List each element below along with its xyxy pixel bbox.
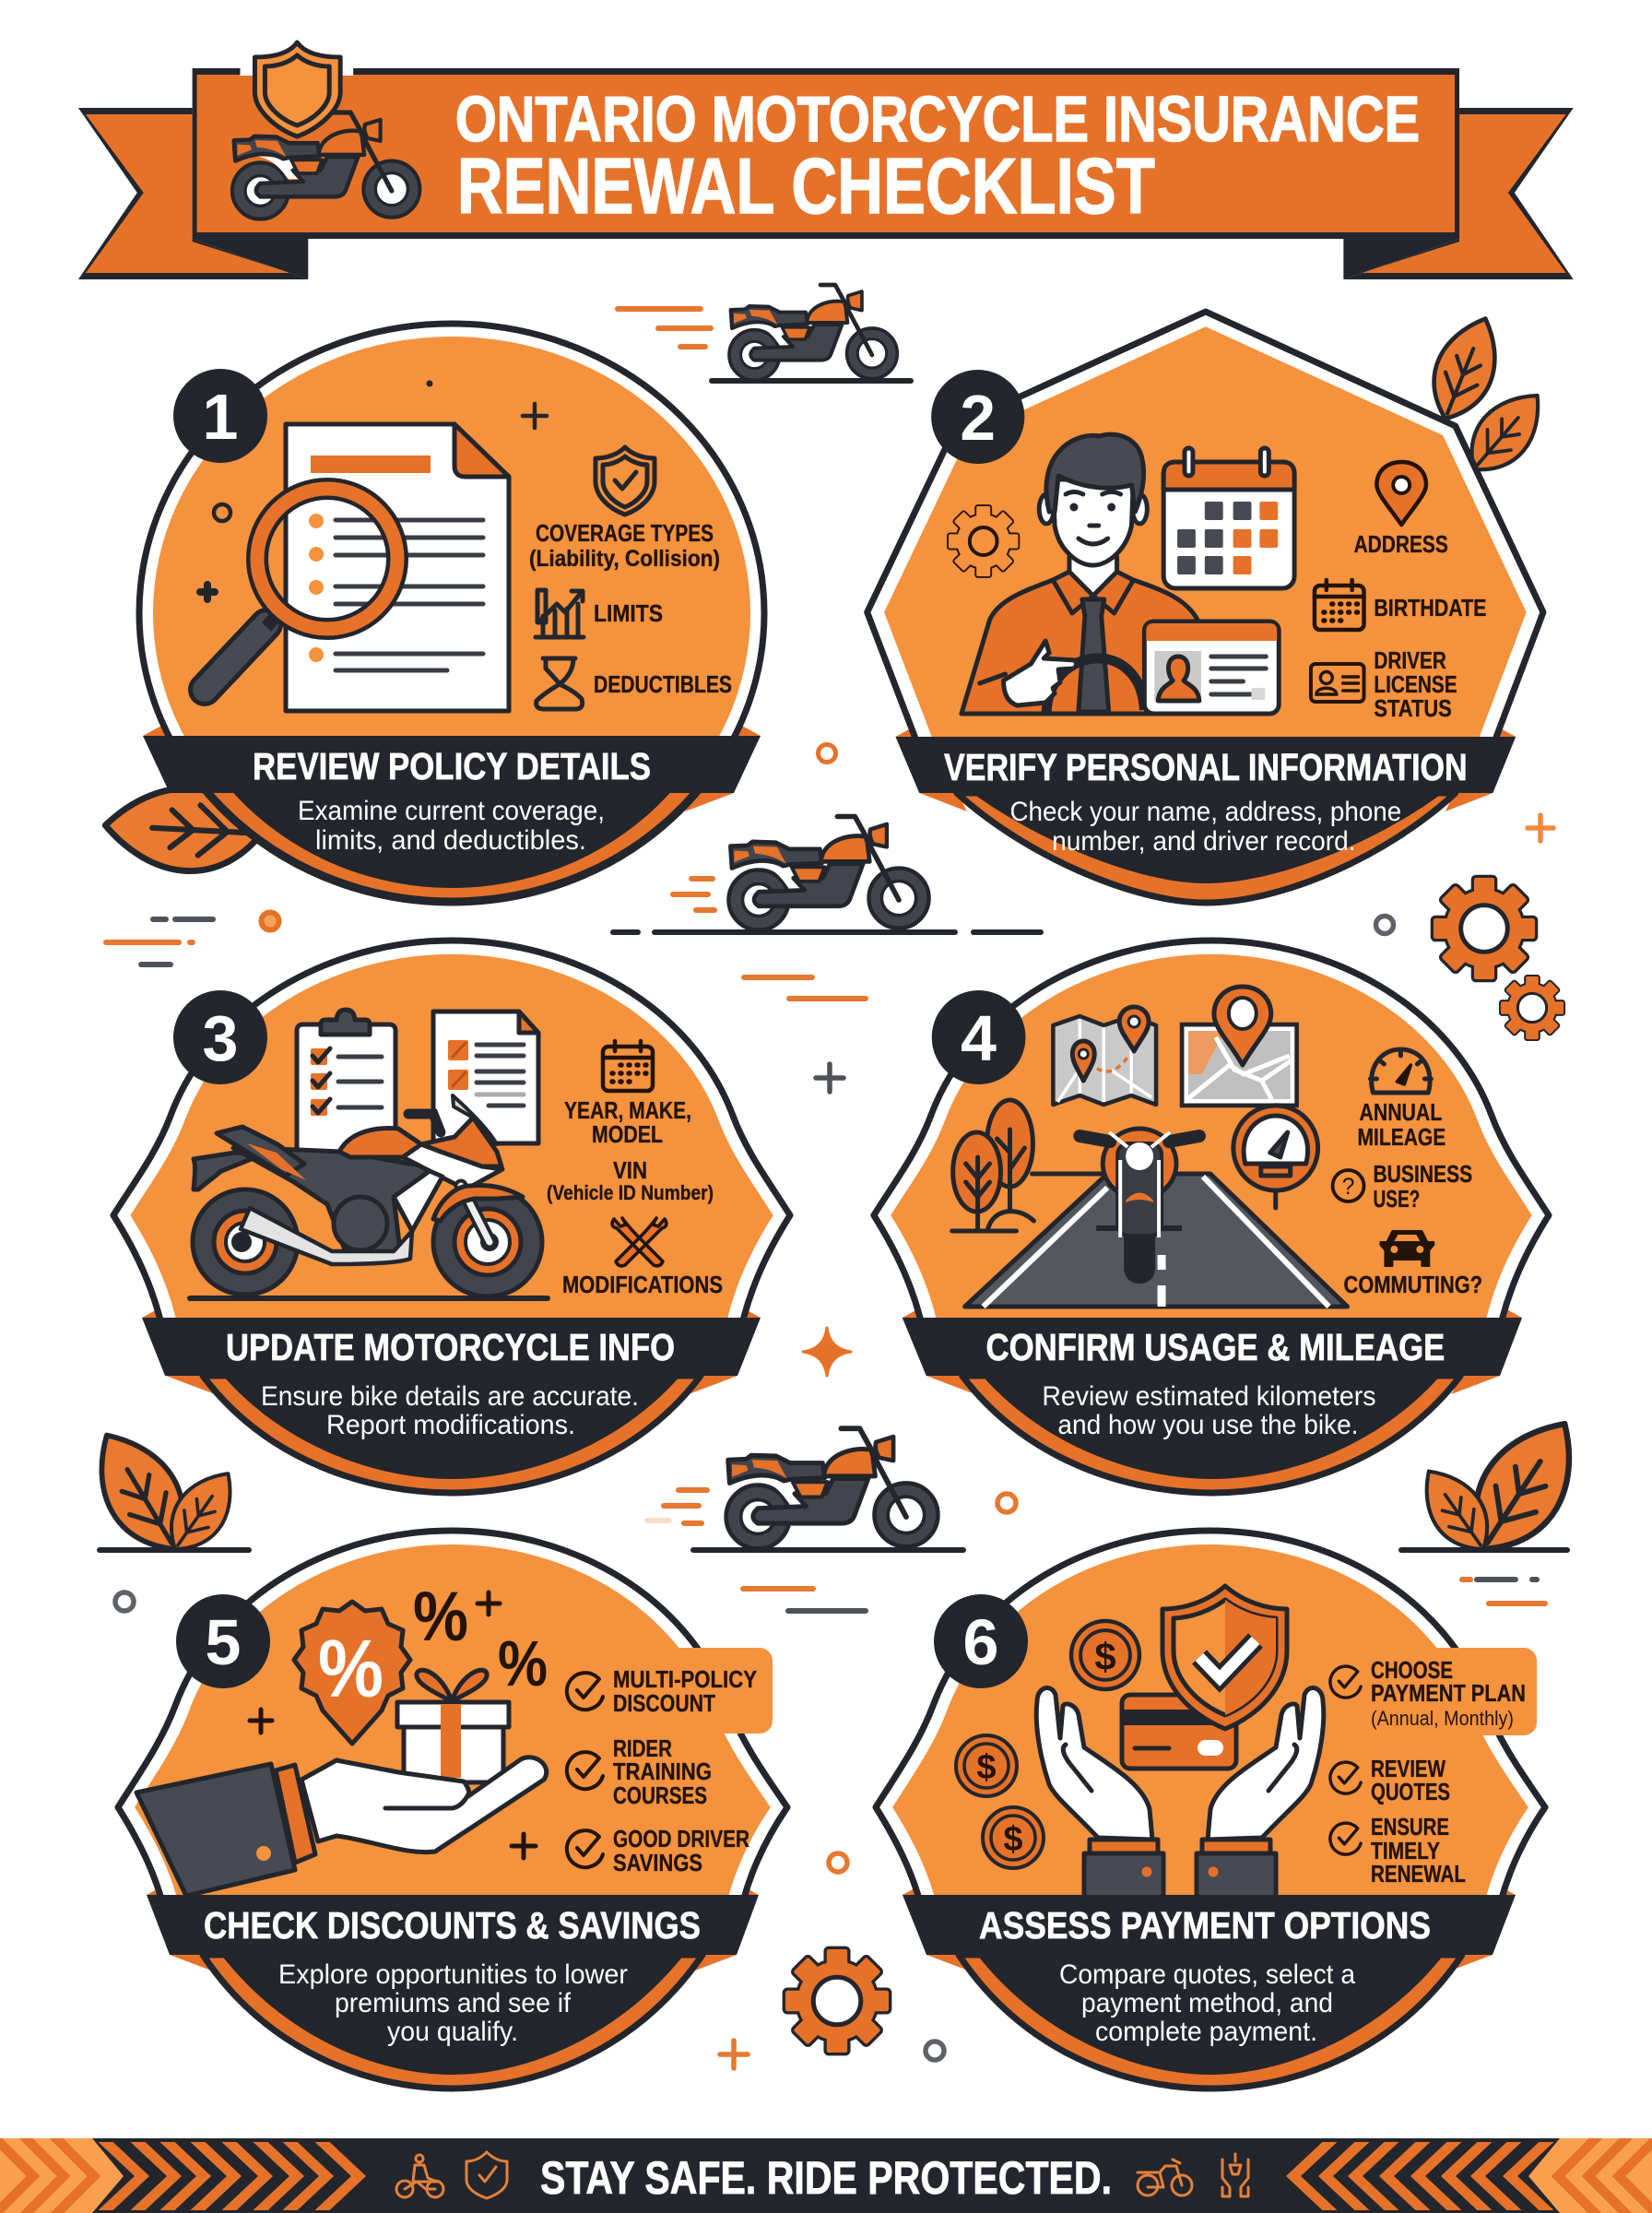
item: year, make, model: MODEL — [592, 1120, 663, 1148]
illustration: sport motorcycle — [190, 1095, 548, 1298]
panel shape — [113, 941, 790, 1346]
item: annual mileage: ANNUAL — [1360, 1098, 1442, 1126]
description: Compare quotes, select a — [1059, 1959, 1355, 1990]
panel: step 4 confirm usage and mileage — [874, 941, 1549, 1493]
item: driver license status: LICENSE — [1374, 672, 1457, 698]
description: Examine current coverage, — [298, 796, 605, 826]
ribbon wings — [142, 1307, 761, 1394]
icon: shield with check — [1162, 1586, 1287, 1729]
lower bowl — [203, 1955, 702, 2089]
bubble highlight — [645, 1648, 773, 1734]
lower bowl — [203, 1376, 701, 1493]
description: you qualify. — [387, 2017, 518, 2047]
person illustration — [962, 434, 1214, 714]
left chevrons — [0, 2130, 359, 2213]
icon: trees — [952, 1100, 1105, 1231]
bubble highlight — [1383, 1648, 1537, 1735]
floating decorations: lower band — [115, 1494, 1545, 2068]
item: choose payment plan — [1330, 1656, 1526, 1730]
step number 1 — [173, 369, 267, 463]
heading banner — [903, 1895, 1516, 1955]
panel: step 2 verify personal information — [867, 312, 1543, 903]
icon: magnifying glass — [205, 489, 397, 690]
item: good driver savings — [567, 1825, 749, 1876]
item: good driver savings: SAVINGS — [613, 1849, 702, 1876]
description — [1059, 1959, 1355, 2047]
item: choose payment plan: PAYMENT PLAN — [1371, 1679, 1526, 1707]
item: choose payment plan: (Annual, Monthly) — [1371, 1707, 1514, 1730]
panel: step 6 assess payment options — [876, 1531, 1545, 2089]
description: complete payment. — [1095, 2017, 1317, 2047]
step number 5 — [176, 1594, 270, 1688]
item: multi-policy discount — [567, 1665, 757, 1717]
step number 4: 4 — [961, 1002, 997, 1074]
description — [298, 796, 605, 856]
item: VIN: (Vehicle ID Number) — [547, 1181, 714, 1204]
item: driver license status: DRIVER — [1374, 648, 1446, 674]
icon: folded map with pins — [1053, 1007, 1156, 1105]
icon: rider — [396, 2155, 443, 2197]
item: review quotes: QUOTES — [1371, 1778, 1450, 1805]
heading banner — [895, 737, 1516, 793]
panel: step 3 update motorcycle info — [113, 941, 790, 1493]
icon: payment card — [1122, 1695, 1236, 1769]
item: business use: USE? — [1373, 1185, 1420, 1213]
icon: speedometer on post — [1233, 1106, 1318, 1208]
item: business use: BUSINESS — [1373, 1160, 1472, 1188]
item: birthdate — [1315, 580, 1486, 630]
item: ensure timely renewal: ENSURE — [1371, 1813, 1449, 1840]
description: limits, and deductibles. — [315, 825, 586, 856]
step number 6 — [934, 1594, 1028, 1688]
description: Report modifications. — [326, 1410, 575, 1440]
lower bowl — [962, 1376, 1460, 1493]
panel shape — [876, 1531, 1545, 1927]
item: review quotes — [1330, 1755, 1450, 1805]
description — [1009, 797, 1401, 857]
percent symbols: % — [498, 1627, 548, 1699]
item: choose payment plan: CHOOSE — [1371, 1656, 1453, 1684]
heading: REVIEW POLICY DETAILS — [253, 745, 651, 787]
description — [261, 1381, 639, 1440]
heading banner — [147, 1895, 759, 1955]
icon: gear — [949, 506, 1018, 576]
icon: footer hands — [1222, 2154, 1248, 2196]
lower bowl — [957, 793, 1456, 903]
motorcycle divider: middle — [613, 817, 1041, 999]
icon: calendar — [1163, 448, 1294, 588]
item: annual mileage — [1358, 1049, 1446, 1151]
step number 2 — [931, 370, 1024, 464]
ribbon main — [193, 68, 1459, 239]
description: and how you use the bike. — [1057, 1410, 1359, 1440]
icon: document — [433, 1012, 538, 1143]
ribbon tail: right — [1343, 108, 1574, 279]
ribbon fold: right — [1343, 239, 1459, 279]
icon: map with location pin — [1182, 987, 1297, 1106]
icon: motorcycle front view — [1080, 1129, 1199, 1284]
percent symbols: % — [413, 1578, 468, 1656]
percent symbols — [250, 1578, 548, 1858]
description — [1042, 1381, 1375, 1440]
item: rider training courses: COURSES — [613, 1781, 707, 1809]
icon: coins: $ — [1003, 1820, 1023, 1859]
heading: ASSESS PAYMENT OPTIONS — [979, 1904, 1431, 1947]
item: annual mileage: MILEAGE — [1358, 1123, 1446, 1151]
footer slogan: STAY SAFE. RIDE PROTECTED. — [540, 2152, 1112, 2204]
panel shape — [867, 312, 1543, 765]
icon: clipboard checklist — [297, 1010, 395, 1157]
ribbon tail: left — [78, 108, 308, 279]
leaves: lower right — [1401, 1402, 1598, 1570]
lower bowl — [211, 793, 692, 900]
item: coverage types: COVERAGE TYPES — [536, 519, 714, 547]
description: Check your name, address, phone — [1009, 797, 1401, 827]
item: ensure timely renewal — [1330, 1813, 1466, 1888]
title line 2: RENEWAL CHECKLIST — [457, 142, 1155, 230]
footer band — [0, 2130, 1652, 2213]
ribbon wings — [143, 725, 761, 811]
step number 2: 2 — [960, 382, 996, 454]
item: review quotes: REVIEW — [1371, 1755, 1446, 1782]
icon: footer shield — [466, 2152, 507, 2198]
step number 6: 6 — [963, 1606, 998, 1678]
icon: coins — [956, 1621, 1139, 1868]
description: number, and driver record. — [1052, 826, 1356, 857]
ribbon wings — [903, 1307, 1522, 1394]
item: commuting: COMMUTING? — [1344, 1271, 1482, 1298]
item: commuting — [1344, 1231, 1482, 1298]
step number 3 — [173, 990, 267, 1084]
item: deductibles: DEDUCTIBLES — [594, 670, 732, 698]
description: Explore opportunities to lower — [278, 1959, 628, 1990]
item: year, make, model: YEAR, MAKE, — [564, 1096, 691, 1124]
icon: gift box — [397, 1670, 509, 1782]
step number 4 — [932, 990, 1025, 1084]
item: coverage types: (Liability, Collision) — [529, 546, 720, 572]
panel shape — [118, 1531, 787, 1927]
icon: percent tag: % — [318, 1623, 384, 1714]
item: year, make, model — [564, 1041, 691, 1148]
icon: coins: $ — [1094, 1635, 1116, 1678]
ribbon wings — [147, 1884, 759, 1973]
heading: CONFIRM USAGE & MILEAGE — [986, 1326, 1445, 1368]
item: limits — [536, 590, 663, 637]
description: payment method, and — [1081, 1988, 1333, 2018]
item: rider training courses: RIDER — [613, 1734, 672, 1762]
item: multi-policy discount: DISCOUNT — [613, 1689, 715, 1717]
right chevrons — [1293, 2130, 1652, 2213]
item: modifications — [562, 1218, 723, 1298]
description: premiums and see if — [335, 1988, 572, 2018]
motorcycle divider: top — [618, 285, 911, 381]
heading banner — [142, 1318, 761, 1376]
step number 3: 3 — [203, 1002, 238, 1074]
item: limits: LIMITS — [594, 599, 663, 627]
item: business use — [1333, 1160, 1472, 1213]
motorcycle divider: lower — [647, 1428, 963, 1611]
item: VIN — [547, 1156, 714, 1204]
item: VIN: VIN — [613, 1156, 647, 1184]
icon: coins: $ — [976, 1748, 997, 1787]
step number 5: 5 — [206, 1606, 241, 1678]
road — [965, 1174, 1348, 1307]
heading banner — [143, 736, 761, 793]
description: Review estimated kilometers — [1042, 1381, 1375, 1412]
item: address: ADDRESS — [1354, 532, 1448, 558]
icon: driver licence card — [1144, 621, 1279, 714]
icon: shield — [254, 42, 340, 136]
item: ensure timely renewal: RENEWAL — [1371, 1860, 1466, 1888]
icon: percent tag — [294, 1602, 410, 1744]
title line 1: ONTARIO MOTORCYCLE INSURANCE — [455, 83, 1420, 155]
panel: step 5 check discounts and savings — [118, 1531, 787, 2089]
heading: UPDATE MOTORCYCLE INFO — [226, 1326, 675, 1368]
item: birthdate: BIRTHDATE — [1374, 596, 1486, 621]
icon: motorcycle — [232, 112, 419, 219]
description: Ensure bike details are accurate. — [261, 1381, 639, 1412]
item: deductibles — [537, 658, 732, 709]
illustration: caring hands — [1036, 1688, 1324, 1898]
document illustration — [286, 424, 509, 711]
floating decorations: middle band — [106, 745, 1564, 1376]
item: good driver savings: GOOD DRIVER — [613, 1825, 749, 1852]
panel: step 1 review policy details — [139, 324, 764, 903]
heading: VERIFY PERSONAL INFORMATION — [944, 746, 1468, 788]
icon: footer motorcycle — [1138, 2160, 1192, 2195]
item: address — [1354, 462, 1448, 558]
leaf: panel 1 — [103, 784, 264, 875]
panel shape — [874, 941, 1549, 1346]
leaves: panel 2 — [1420, 308, 1556, 486]
ribbon wings — [903, 1884, 1516, 1973]
heading banner — [903, 1318, 1522, 1376]
step number 1: 1 — [203, 381, 238, 453]
lower bowl — [959, 1955, 1462, 2089]
item: driver license status — [1311, 648, 1457, 722]
item: business use: ? — [1342, 1174, 1354, 1200]
item: rider training courses: TRAINING — [613, 1757, 712, 1785]
item: ensure timely renewal: TIMELY — [1371, 1837, 1440, 1864]
panel shape — [139, 324, 764, 903]
item: multi-policy discount: MULTI-POLICY — [613, 1665, 757, 1693]
description — [278, 1959, 628, 2047]
leaves: lower left — [77, 1417, 249, 1568]
item: rider training courses — [567, 1734, 712, 1809]
item: coverage types — [529, 447, 720, 572]
heading: CHECK DISCOUNTS & SAVINGS — [204, 1904, 701, 1947]
ribbon fold: left — [193, 239, 308, 279]
title banner — [78, 42, 1574, 279]
decorations — [200, 380, 547, 599]
illustration: open hand with sleeve — [136, 1757, 547, 1896]
item: driver license status: STATUS — [1374, 696, 1452, 722]
ribbon wings — [895, 726, 1516, 811]
item: modifications: MODIFICATIONS — [562, 1271, 723, 1298]
